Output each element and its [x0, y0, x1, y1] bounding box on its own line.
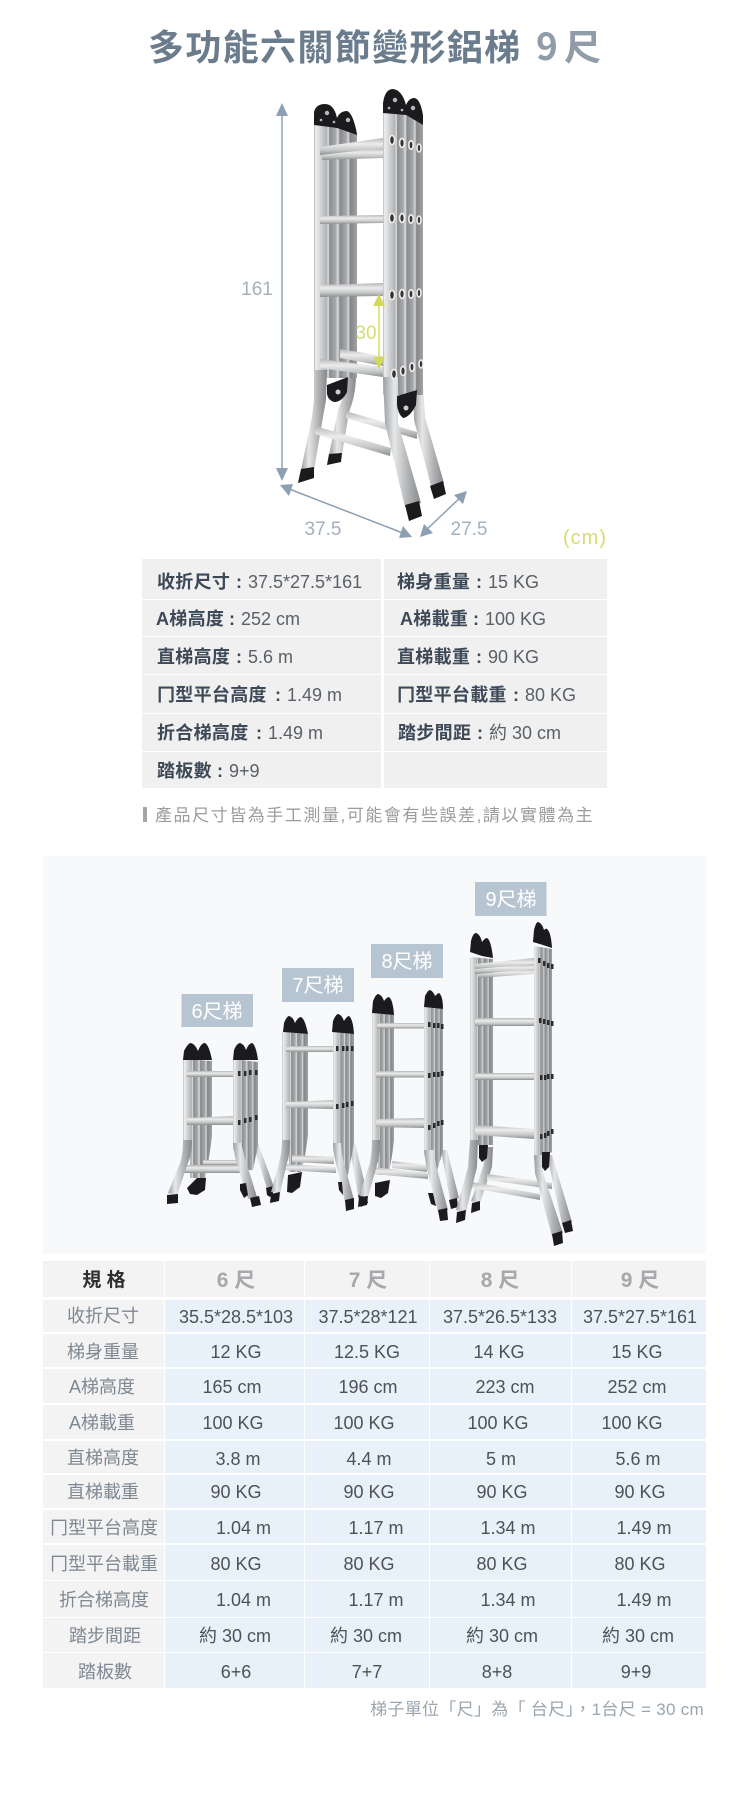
- table row: A height: A梯高度: [69, 1377, 135, 1397]
- panel: spec summary: :: [236, 572, 242, 592]
- table row: straight height: 3.8 m: [215, 1449, 261, 1469]
- ladder: 9 ft: [456, 922, 573, 1246]
- table row: platform height: 1.04 m: [216, 1518, 271, 1538]
- panel: spec summary: :: [236, 647, 242, 667]
- panel: spec summary: 冂型平台高度: [157, 684, 267, 705]
- dimension: rung spacing 30: [355, 294, 385, 369]
- table row: weight: 12 KG: [210, 1342, 262, 1362]
- table row: step spacing: 約 30 cm: [466, 1626, 538, 1646]
- tag: 8 ft: [371, 944, 443, 978]
- panel: spec summary: 90 KG: [488, 647, 539, 667]
- table row: folding height: 1.04 m: [216, 1590, 271, 1610]
- panel: spec summary: 1.49 m: [287, 685, 342, 705]
- panel: spec summary: :: [217, 761, 223, 781]
- table row: A load: 100 KG: [601, 1413, 663, 1433]
- rear legs: [329, 375, 356, 455]
- holes: [389, 135, 423, 379]
- dimension: height 161: 161: [241, 279, 273, 300]
- table row: weight: [43, 1334, 706, 1367]
- panel: spec summary: 直梯高度: [157, 646, 230, 667]
- table row: steps: 9+9: [621, 1662, 651, 1682]
- dimension: width 37.5: 37.5: [305, 519, 341, 540]
- table row: straight load: 90 KG: [614, 1482, 666, 1502]
- table row: step spacing: [43, 1618, 706, 1652]
- panel: spec summary: 15 KG: [488, 572, 539, 592]
- table row: straight load: 90 KG: [343, 1482, 395, 1502]
- dimension: depth 27.5: 27.5: [451, 519, 487, 540]
- table row: A height: 223 cm: [475, 1377, 535, 1397]
- table row: steps: [43, 1653, 706, 1688]
- ladder: 6 ft: [167, 1043, 274, 1207]
- tag: 7 ft: 7尺梯: [292, 974, 344, 997]
- panel: spec summary: :: [473, 609, 479, 629]
- panel: spec summary: A梯載重: [400, 609, 468, 629]
- table row: folded size: 收折尺寸: [67, 1306, 139, 1326]
- table row: steps: 8+8: [482, 1662, 512, 1682]
- table row: folding height: 1.49 m: [616, 1590, 672, 1610]
- table row: step spacing: 約 30 cm: [602, 1626, 674, 1646]
- table row: straight height: 5 m: [486, 1449, 516, 1469]
- dimension: depth 27.5: [420, 491, 487, 540]
- table row: folding height: 折合梯高度: [59, 1590, 149, 1610]
- feet: [298, 467, 314, 483]
- panel: spec summary: 9+9: [229, 761, 260, 781]
- table row: straight load: 90 KG: [476, 1482, 528, 1502]
- rungs: [322, 148, 383, 160]
- table row: folding height: 1.17 m: [348, 1590, 404, 1610]
- table row: straight load: [43, 1475, 706, 1508]
- panel: spec summary: :: [477, 723, 483, 743]
- table row: folded size: [43, 1300, 706, 1332]
- panel: spec summary: :: [256, 723, 262, 743]
- tag: 7 ft: [282, 968, 354, 1002]
- table row: A height: 165 cm: [202, 1377, 262, 1397]
- table row: platform load: 80 KG: [210, 1554, 262, 1574]
- table header: [43, 1261, 706, 1297]
- panel: spec summary: 直梯載重: [397, 646, 470, 667]
- table row: platform load: [43, 1545, 706, 1580]
- unit label: (cm): [563, 527, 607, 549]
- table row: straight height: [43, 1441, 706, 1473]
- table row: A load: 100 KG: [467, 1413, 529, 1433]
- table row: weight: 15 KG: [611, 1342, 663, 1362]
- panel: spec summary: 252 cm: [241, 609, 300, 629]
- table row: A height: 196 cm: [338, 1377, 398, 1397]
- table row: weight: 14 KG: [473, 1342, 525, 1362]
- panel: spec summary: :: [229, 609, 235, 629]
- table row: platform load: 80 KG: [476, 1554, 528, 1574]
- panel: spec summary: :: [275, 685, 281, 705]
- dimension: width 37.5: [280, 484, 412, 540]
- tag: 9 ft: [475, 882, 546, 916]
- table row: A height: 252 cm: [607, 1377, 667, 1397]
- panel: spec summary: 收折尺寸: [157, 572, 230, 592]
- rear and upper clusters: [314, 125, 357, 378]
- table row: straight load: 直梯載重: [67, 1482, 139, 1502]
- table row: platform height: 1.49 m: [616, 1518, 672, 1538]
- top caps: [314, 104, 357, 135]
- table row: A load: 100 KG: [333, 1413, 395, 1433]
- panel: spec summary: 踏板數: [157, 761, 212, 781]
- table header: 8 尺: [481, 1269, 519, 1292]
- table row: folded size: 35.5*28.5*103: [179, 1307, 293, 1327]
- title: 尺: [564, 27, 602, 68]
- panel: spec summary: 折合梯高度: [157, 722, 248, 743]
- table row: steps: 6+6: [221, 1662, 251, 1682]
- panel: spec summary: 1.49 m: [268, 723, 323, 743]
- hinges: [327, 377, 348, 402]
- panel: spec summary: 踏步間距: [398, 723, 471, 743]
- panel: spec summary: 37.5*27.5*161: [248, 572, 362, 592]
- dimension: rung spacing 30: 30: [355, 323, 377, 344]
- panel: spec summary: 冂型平台載重: [397, 684, 507, 705]
- footnote: 梯子單位「尺」為「 台尺」，1台尺 = 30 cm: [370, 1700, 704, 1719]
- table row: platform height: 1.34 m: [480, 1518, 536, 1538]
- tag: 9 ft: 9尺梯: [485, 888, 537, 911]
- table row: A load: [43, 1405, 706, 1439]
- table row: weight: 12.5 KG: [334, 1342, 400, 1362]
- table row: straight load: 90 KG: [210, 1482, 262, 1502]
- panel: ladder size comparison: [43, 856, 706, 1254]
- table row: A load: 100 KG: [202, 1413, 264, 1433]
- ladder: 8 ft: [358, 990, 459, 1221]
- panel: spec summary: 梯身重量: [397, 572, 470, 592]
- table row: steps: 踏板數: [78, 1662, 132, 1682]
- tag: 8 ft: 8尺梯: [381, 950, 433, 973]
- table row: platform load: 80 KG: [614, 1554, 666, 1574]
- table row: step spacing: 踏步間距: [69, 1626, 141, 1646]
- disclaimer note: 產品尺寸皆為手工測量,可能會有些誤差,請以實體為主: [155, 806, 594, 825]
- table row: folding height: 1.34 m: [480, 1590, 536, 1610]
- panel: spec summary: [142, 559, 607, 788]
- panel: spec summary: :: [476, 572, 482, 592]
- table row: platform load: 冂型平台載重: [50, 1554, 158, 1574]
- title: 9: [536, 17, 559, 71]
- table row: folding height: [43, 1581, 706, 1617]
- dimension: height 161: [241, 103, 288, 481]
- panel: spec summary: 80 KG: [525, 685, 576, 705]
- comparison table: [43, 1261, 706, 1688]
- table row: platform height: 冂型平台高度: [50, 1518, 158, 1538]
- table row: A load: A梯載重: [69, 1413, 135, 1433]
- table row: folded size: 37.5*26.5*133: [443, 1307, 557, 1327]
- panel: spec summary: A梯高度: [156, 608, 224, 629]
- panel: spec summary: :: [476, 647, 482, 667]
- table header: 6 尺: [217, 1269, 255, 1292]
- table row: A height: [43, 1369, 706, 1403]
- table header: 7 尺: [349, 1269, 387, 1292]
- table row: straight height: 4.4 m: [346, 1449, 392, 1469]
- front legs: [301, 370, 327, 470]
- panel: spec summary: 100 KG: [485, 609, 546, 629]
- table row: weight: 梯身重量: [67, 1342, 139, 1362]
- ladder: 7 ft: [270, 1014, 368, 1211]
- panel: spec summary: :: [513, 685, 519, 705]
- table row: steps: 7+7: [352, 1662, 382, 1682]
- tag: 6 ft: 6尺梯: [191, 1000, 243, 1023]
- table row: platform load: 80 KG: [343, 1554, 395, 1574]
- table row: straight height: 5.6 m: [615, 1449, 661, 1469]
- panel: spec summary: 約 30 cm: [489, 723, 561, 743]
- table row: step spacing: 約 30 cm: [330, 1626, 402, 1646]
- title: 多功能六關節變形鋁梯: [148, 27, 522, 68]
- tag: 6 ft: [182, 994, 253, 1027]
- table row: folded size: 37.5*28*121: [318, 1307, 418, 1327]
- table row: straight height: 直梯高度: [67, 1448, 139, 1468]
- main ladder photo: [298, 89, 446, 521]
- table row: step spacing: 約 30 cm: [199, 1626, 271, 1646]
- table header: 9 尺: [621, 1269, 659, 1292]
- table header: 規 格: [82, 1269, 126, 1291]
- table row: folded size: 37.5*27.5*161: [583, 1307, 697, 1327]
- table row: platform height: 1.17 m: [348, 1518, 404, 1538]
- panel: spec summary: 5.6 m: [248, 647, 293, 667]
- table row: platform height: [43, 1510, 706, 1543]
